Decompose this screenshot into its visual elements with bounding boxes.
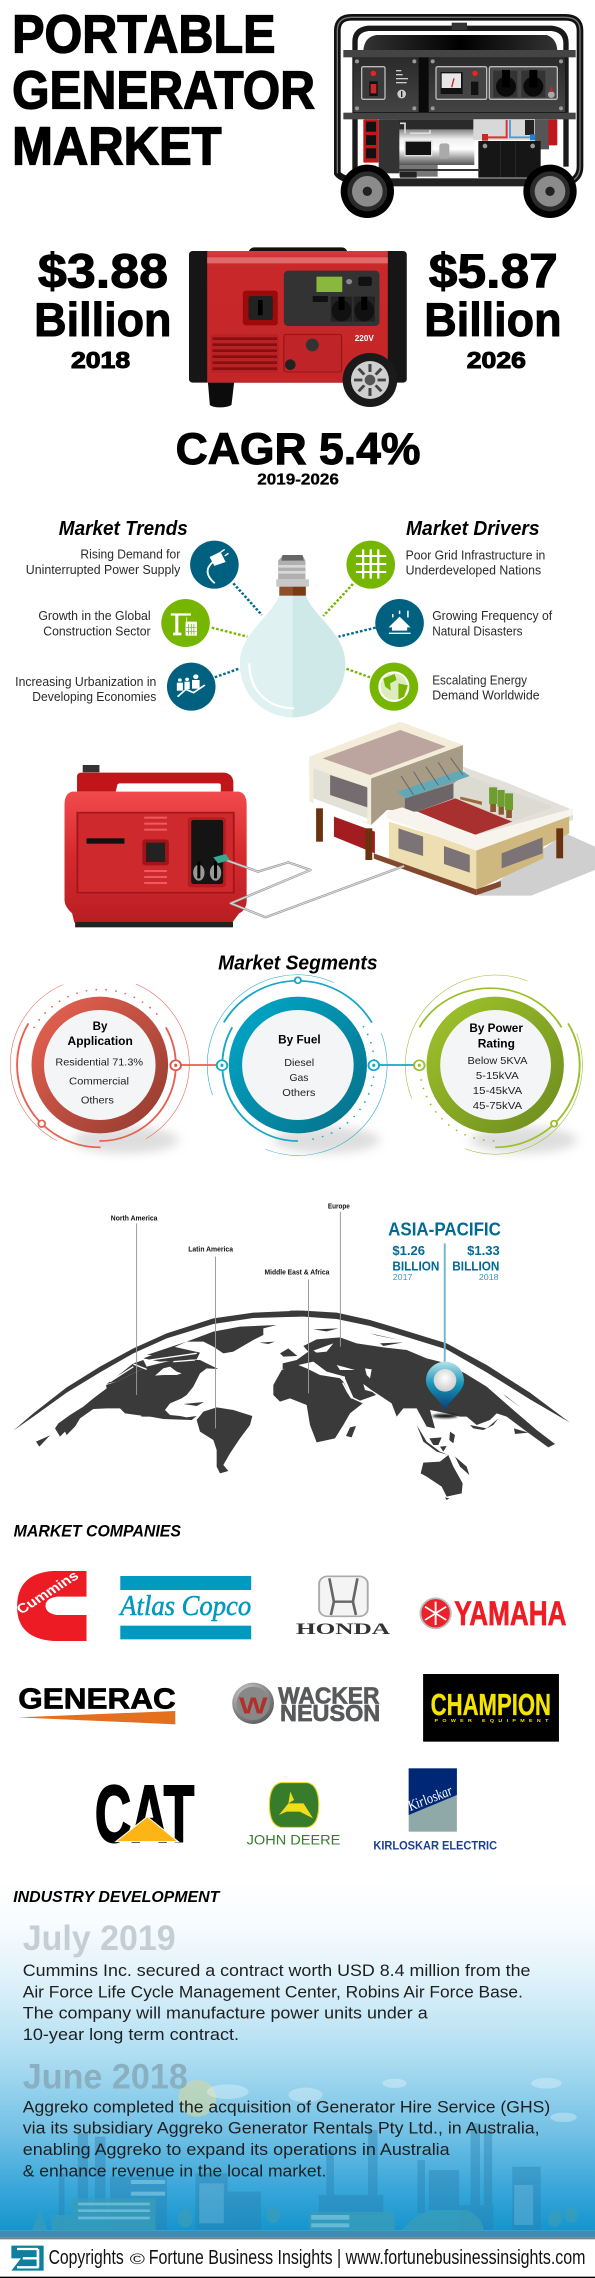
trend: urbanization: Increasing Urbanization in: [15, 675, 156, 689]
development: June 2018: enabling Aggreko to expand its operations in Australia: [23, 2140, 450, 2159]
region labels: Middle East & Africa: [264, 1268, 330, 1277]
footer: ©: [130, 2252, 146, 2268]
segment: by application: Application: [68, 1034, 133, 1048]
icon: red inverter generator: [189, 247, 407, 407]
segment: by application: By: [93, 1019, 108, 1033]
development: June 2018: [23, 2057, 550, 2180]
segment: by fuel: By Fuel: [278, 1032, 321, 1046]
logo: Generac: GENERAC: [18, 1684, 176, 1715]
region labels: Latin America: [188, 1245, 234, 1254]
icon: Fortune Business Insights logo: [11, 2246, 44, 2271]
trend: urbanization: [15, 663, 216, 711]
trend: uninterrupted power: Uninterrupted Power Supply: [26, 563, 180, 577]
market size 2018: $3.88: [38, 243, 168, 298]
development: July 2019: Cummins Inc. secured a contract worth USD 8.4 million from the: [23, 1961, 531, 1980]
CAGR: CAGR 5.4%: [176, 425, 420, 474]
heading: market segments: Market Segments: [218, 951, 378, 974]
heading: market companies: MARKET COMPANIES: [14, 1522, 181, 1540]
driver: natural disasters: Natural Disasters: [432, 624, 523, 638]
logo: Wacker Neuson: NEUSON: [280, 1701, 380, 1727]
market segments section: [10, 951, 582, 1155]
region labels: [111, 1202, 350, 1428]
asia-pacific callout: 2018: [479, 1273, 499, 1282]
driver: energy demand: Escalating Energy: [432, 673, 527, 687]
trend: uninterrupted power: [26, 541, 239, 589]
segment: by fuel: [207, 975, 387, 1155]
logo: Champion: [423, 1674, 559, 1742]
segment: by application: Others: [81, 1095, 114, 1106]
footer: Copyrights: [49, 2246, 124, 2269]
title: [12, 5, 315, 176]
asia-pacific callout: BILLION: [452, 1259, 499, 1273]
development: July 2019: The company will manufacture power units under a: [23, 2004, 428, 2022]
segment: by application: Residential 71.3%: [55, 1057, 144, 1068]
icon: red generator: [65, 765, 247, 927]
segment: by fuel: Others: [282, 1088, 315, 1099]
segment: by power rating: 5-15kVA: [476, 1071, 520, 1082]
segment: by power rating: 15-45kVA: [473, 1086, 523, 1097]
trend: construction: [38, 599, 210, 647]
logo: Kirloskar Electric: KIRLOSKAR ELECTRIC: [373, 1838, 497, 1852]
logo: Wacker Neuson: WACKER: [278, 1684, 380, 1709]
market size 2018: Billion: [34, 293, 172, 346]
market size 2026: 2026: [467, 347, 526, 374]
logo: Wacker Neuson: [232, 1683, 380, 1727]
segment: by fuel: Gas: [290, 1073, 309, 1084]
market size 2018: [34, 243, 172, 374]
driver: grid infrastructure: Poor Grid Infrastructure in: [406, 548, 545, 562]
world map: Americas: [13, 1311, 300, 1473]
segment: by power rating: Below 5KVA: [467, 1056, 528, 1067]
industry development section: [0, 1880, 595, 2278]
sky background with city: [0, 1880, 595, 2239]
logo: Atlas Copco: Atlas Copco: [119, 1590, 251, 1622]
development: July 2019: 10-year long term contract.: [23, 2025, 239, 2044]
driver: energy demand: [370, 663, 540, 711]
trend: construction: Construction Sector: [43, 624, 151, 638]
logo: Champion: POWER EQUIPMENT: [434, 1718, 548, 1724]
market trends and drivers section: [15, 516, 595, 927]
segment: by application: Commercial: [69, 1076, 129, 1087]
logo: Cummins: Cummins: [14, 1568, 82, 1618]
heading: market trends: Market Trends: [59, 516, 188, 540]
world map: Europe, Africa, Asia and Australia: [273, 1311, 570, 1500]
logo: CAT: CAT: [95, 1769, 194, 1859]
region labels: North America: [111, 1214, 158, 1222]
logo: Atlas Copco: [119, 1576, 251, 1639]
market size 2026: [424, 243, 562, 374]
development: July 2019: Air Force Life Cycle Management Center, Robins Air Force Base.: [23, 1982, 523, 2001]
asia-pacific callout: BILLION: [392, 1259, 439, 1273]
market size 2026: $5.87: [429, 243, 558, 298]
footer: [0, 2246, 595, 2278]
connectors between segments: [170, 1060, 425, 1070]
icon: black framed portable generator: [337, 17, 580, 218]
driver: grid infrastructure: [346, 541, 545, 589]
logo: Kirloskar Electric: [373, 1768, 497, 1852]
trend: uninterrupted power: Rising Demand for: [80, 547, 181, 561]
logo: John Deere: [247, 1783, 340, 1848]
asia-pacific callout: [388, 1220, 501, 1363]
segment: by power rating: [405, 975, 582, 1154]
logo: CAT: [95, 1769, 194, 1859]
logo: John Deere: JOHN DEERE: [247, 1832, 340, 1848]
CAGR: 2019-2026: [257, 470, 339, 488]
region labels: Europe: [328, 1202, 350, 1211]
segment: by power rating: Rating: [478, 1036, 515, 1050]
trend: urbanization: Developing Economies: [32, 690, 157, 704]
development: June 2018: via its subsidiary Aggreko Generator Rentals Pty Ltd., in Australia,: [23, 2119, 540, 2137]
segment: by fuel: Diesel: [284, 1058, 314, 1069]
market size 2018: 2018: [71, 347, 130, 374]
regional map annotations: [111, 1202, 501, 1428]
development: July 2019: July 2019: [23, 1918, 176, 1957]
soft shadows under segment circles: [72, 1127, 577, 1153]
title: GENERATOR: [12, 61, 315, 120]
icon: location pin: [426, 1362, 464, 1418]
title: PORTABLE: [12, 5, 275, 64]
logo: Kirloskar Electric: Kirloskar: [404, 1783, 456, 1815]
logo: Honda: HONDA: [296, 1620, 390, 1638]
logo: Yamaha: [420, 1594, 567, 1632]
segment: by power rating: 45-75kVA: [473, 1101, 523, 1112]
title: MARKET: [12, 117, 222, 176]
development: June 2018: & enhance revenue in the local market.: [23, 2161, 326, 2180]
driver: energy demand: Demand Worldwide: [432, 688, 540, 702]
heading: industry development: INDUSTRY DEVELOPMENT: [13, 1887, 221, 1906]
power cord: [213, 854, 404, 917]
development: July 2019: [23, 1918, 531, 2044]
header and market size section: [12, 5, 562, 488]
logo: Honda: [296, 1576, 390, 1638]
asia-pacific callout: 2017: [393, 1273, 412, 1282]
icon: house: [309, 722, 595, 896]
driver: natural disasters: [375, 599, 552, 647]
trend: construction: Growth in the Global: [38, 609, 151, 623]
asia-pacific callout: $1.26: [392, 1244, 425, 1258]
development: June 2018: Aggreko completed the acquisition of Generator Hire Service (GHS): [23, 2097, 550, 2116]
segment: by power rating: By Power: [469, 1021, 523, 1035]
market companies section: [14, 1522, 567, 1859]
asia-pacific callout: $1.33: [467, 1244, 500, 1258]
logo: Wacker Neuson: W: [239, 1694, 268, 1719]
market size 2026: Billion: [424, 293, 562, 346]
driver: natural disasters: Growing Frequency of: [432, 609, 552, 623]
icon: red inverter generator: 220V: [355, 334, 374, 343]
illustration: house with portable generator: [65, 722, 595, 927]
segment: by application: [10, 984, 189, 1147]
heading: market drivers: Market Drivers: [406, 516, 540, 540]
development: June 2018: June 2018: [23, 2057, 188, 2096]
icon: light bulb with connectors: [212, 555, 376, 717]
driver: grid infrastructure: Underdeveloped Nations: [406, 563, 541, 577]
asia-pacific callout: ASIA-PACIFIC: [388, 1220, 501, 1240]
logo: Cummins: [14, 1568, 87, 1641]
